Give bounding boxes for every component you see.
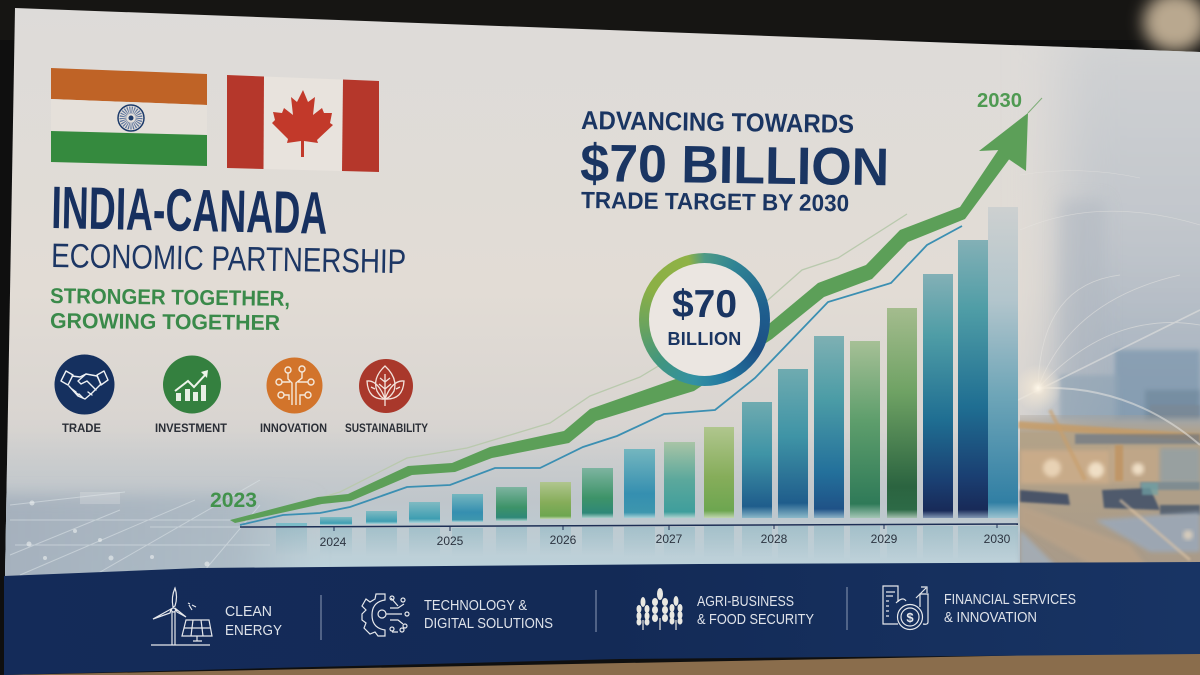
label: clean energy: ENERGY [225, 622, 282, 639]
x axis: 2028 [761, 532, 788, 546]
network arcs [1018, 171, 1200, 445]
x axis: 2024 [320, 535, 347, 549]
icon: sustainability leaves [359, 359, 413, 413]
tagline: STRONGER TOGETHER, [50, 284, 290, 311]
tagline: GROWING TOGETHER [50, 309, 281, 335]
tagline [50, 284, 290, 335]
label: trade: TRADE [62, 421, 101, 435]
city lights [1018, 405, 1200, 570]
icon: Ashoka chakra [118, 105, 144, 131]
label: 2030: 2030 [977, 90, 1022, 112]
headline block: $70 BILLION [580, 134, 890, 197]
icon: wheat stalks [636, 588, 682, 630]
x axis: 2029 [871, 532, 898, 546]
icon: maple leaf [272, 90, 333, 157]
callout: $70 billion ring: BILLION [667, 329, 742, 349]
callout: $70 billion ring: $70 [672, 283, 737, 326]
label: sustainability: SUSTAINABILITY [345, 421, 428, 435]
green growth arrow [230, 98, 1042, 523]
x axis [240, 524, 1018, 549]
label: investment: INVESTMENT [155, 421, 228, 435]
icon: investment chart [163, 356, 221, 414]
icon: finance document and coin: $ [906, 610, 914, 625]
low left city haze [10, 480, 270, 575]
x axis: 2025 [437, 534, 464, 548]
label: financial services [944, 592, 1076, 626]
faint trend line [240, 214, 907, 522]
low left small lights [26, 492, 210, 566]
bar chart [240, 207, 1018, 560]
label: technology: DIGITAL SOLUTIONS [424, 616, 553, 632]
flag: Canada [227, 75, 379, 172]
icon: finance document and coin [883, 586, 928, 630]
label: financial services: FINANCIAL SERVICES [944, 592, 1076, 608]
label: financial services: & INNOVATION [944, 610, 1037, 626]
label: innovation: INNOVATION [260, 421, 327, 435]
title: India-Canada: INDIA-CANADA [51, 174, 328, 247]
label: agri-business [697, 594, 814, 628]
label: agri-business: AGRI-BUSINESS [697, 594, 794, 610]
headline block [580, 105, 890, 216]
bar reflections [276, 526, 1018, 560]
icon: gear and circuits [362, 594, 409, 636]
label: clean energy [225, 603, 282, 639]
icon: wind turbine and solar panel [151, 588, 212, 645]
flag: India [51, 68, 207, 166]
label: clean energy: CLEAN [225, 603, 272, 620]
blue trend line [240, 226, 962, 525]
x axis: 2030 [984, 532, 1011, 546]
subtitle: Economic Partnership: ECONOMIC PARTNERSHIP [51, 237, 406, 281]
callout: $70 billion ring [639, 253, 770, 386]
headline block: TRADE TARGET BY 2030 [581, 187, 849, 216]
x axis: 2026 [550, 533, 577, 547]
arrowhead [979, 113, 1028, 171]
label: 2023: 2023 [210, 489, 257, 512]
x axis: 2027 [656, 532, 683, 546]
label: agri-business: & FOOD SECURITY [697, 612, 814, 628]
footer band [4, 562, 1200, 675]
headline block: ADVANCING TOWARDS [581, 105, 854, 139]
icon: innovation circuit [266, 358, 322, 414]
icon: trade handshake [54, 354, 114, 414]
label: technology [424, 598, 553, 632]
label: technology: TECHNOLOGY & [424, 598, 527, 614]
